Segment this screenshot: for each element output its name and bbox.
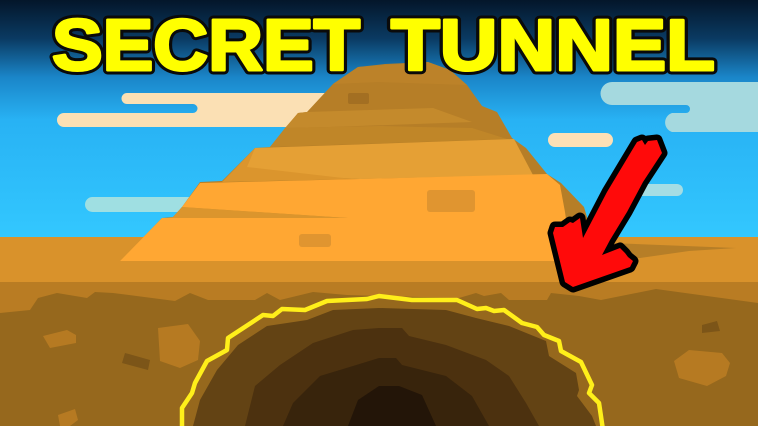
- title outline: [52, 6, 715, 86]
- subsoil layer: [0, 282, 758, 426]
- ground shadow: [610, 243, 736, 258]
- title outline: TUNNEL: [391, 6, 715, 86]
- third tier: [247, 139, 533, 179]
- third tier dark base: [222, 148, 360, 182]
- bottom tier: [120, 174, 572, 261]
- tunnel ring 3: [283, 358, 489, 426]
- second tier upper band: [285, 108, 472, 128]
- top tier shade: [333, 62, 467, 85]
- tunnel ring 2: [245, 328, 539, 426]
- rocks: [43, 321, 730, 426]
- desert ground: [0, 237, 758, 283]
- pyramid: [120, 62, 600, 261]
- pyramid silhouette: [120, 62, 600, 261]
- tunnel ring 1: [193, 308, 596, 426]
- title fill: [52, 6, 715, 86]
- clouds: [57, 82, 758, 212]
- title fill: TUNNEL: [391, 6, 715, 86]
- dark soil: [0, 289, 758, 426]
- title fill: SECRET: [52, 6, 360, 86]
- title outline: SECRET: [52, 6, 360, 86]
- bottom tier window right: [427, 190, 475, 212]
- bottom tier wedge: [162, 207, 348, 219]
- bottom tier window left: [299, 234, 331, 247]
- red arrow: [553, 140, 662, 287]
- tunnel ring 4: [348, 386, 436, 426]
- top tier window: [348, 93, 369, 104]
- title: [52, 6, 715, 86]
- sky background: [0, 0, 758, 240]
- second tier lower band: [270, 126, 507, 147]
- yellow tunnel outline: [182, 296, 603, 426]
- secret tunnel: [182, 296, 603, 426]
